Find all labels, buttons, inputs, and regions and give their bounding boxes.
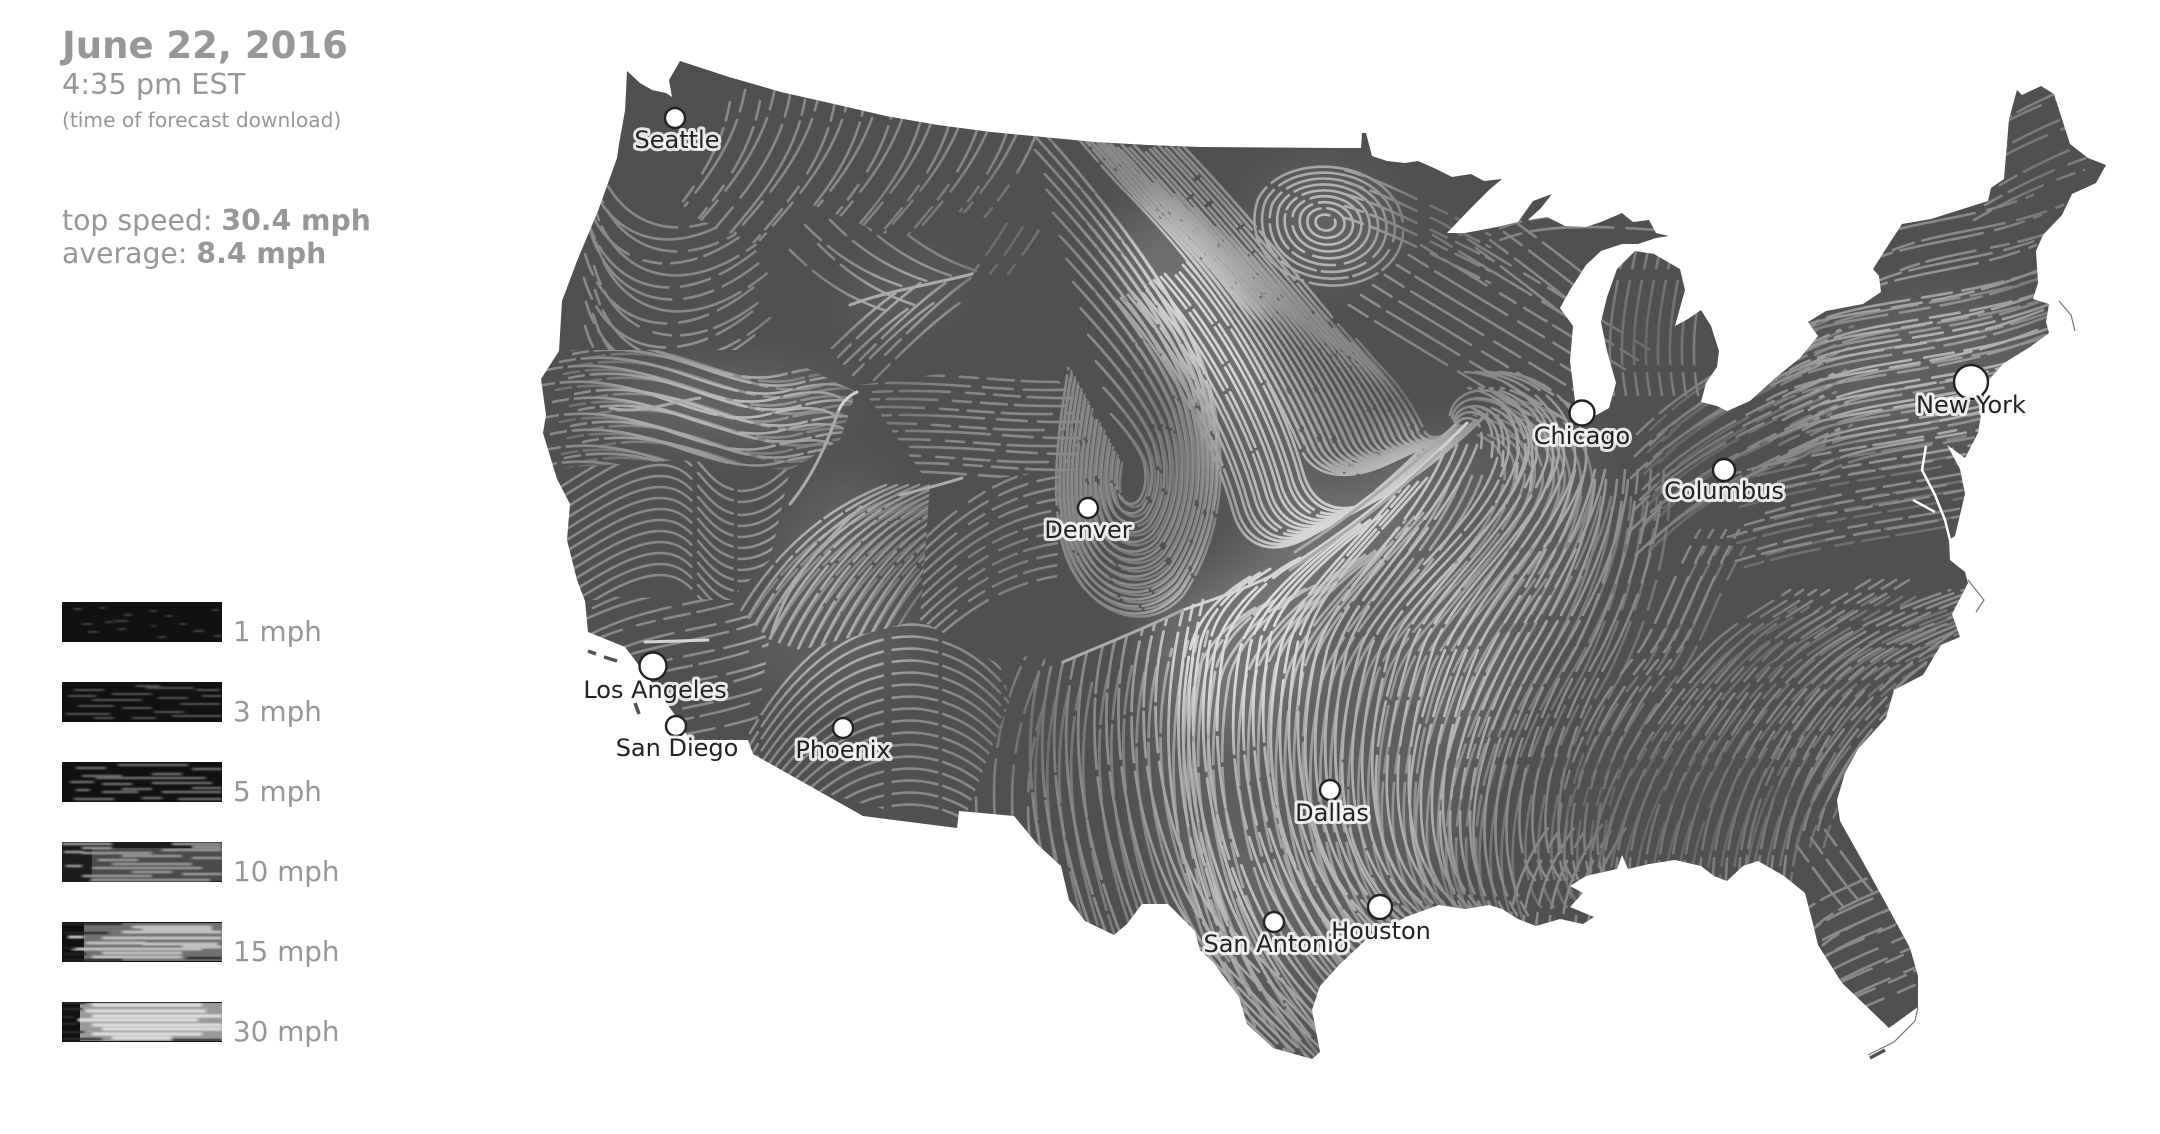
city: San Diego: San Diego [616, 734, 738, 762]
legend label: 10 mph: 10 mph [233, 855, 340, 888]
city: Dallas: Dallas [1295, 799, 1369, 827]
legend swatch: 5 mph [62, 762, 222, 802]
city: New York [1916, 365, 2026, 419]
streamlines: arcs converging at the spiral [1078, 140, 1463, 476]
streamlines: Utah horizontal [839, 375, 1104, 478]
city: Chicago [1534, 400, 1630, 450]
streamlines: Southern California [552, 510, 783, 779]
streamlines: Gulf coast [1510, 825, 1628, 935]
streamlines: Michigan [1500, 215, 1708, 395]
forecast note: (time of forecast download) [62, 108, 341, 132]
city: Seattle [635, 108, 719, 154]
city: Chicago: Chicago [1534, 422, 1630, 450]
legend swatch: 10 mph [62, 842, 222, 882]
city: Houston [1331, 895, 1431, 945]
bright streaks along convergence lines [610, 274, 1467, 662]
legend label: 5 mph: 5 mph [233, 775, 322, 808]
city: Denver [1044, 498, 1132, 544]
streamlines: Virginia and Appalachians [1722, 430, 2010, 567]
city: San Antonio: San Antonio [1203, 930, 1349, 958]
streamlines: Denver arcs [1024, 110, 1221, 617]
wind map of the contiguous United States [530, 61, 2110, 1071]
city: Columbus [1664, 459, 1784, 505]
streamlines: Colorado plateau [900, 464, 1075, 674]
city: San Diego [616, 716, 738, 762]
wind tone haze [605, 165, 2062, 1060]
streamlines: South Texas tip [1198, 932, 1320, 1059]
legend swatch: 15 mph [62, 922, 222, 962]
streamlines: spiral near Chicago [1450, 390, 1532, 490]
city: San Antonio [1203, 912, 1349, 958]
legend swatch: 3 mph [62, 682, 222, 722]
streamlines: Minnesota and Wisconsin [1349, 224, 1650, 430]
streamlines: Florida [1796, 830, 1943, 1035]
streamlines: New Mexico trough [976, 654, 1061, 884]
land base [541, 61, 2106, 1059]
wind speed statistics [62, 204, 371, 270]
city: Phoenix: Phoenix [795, 736, 891, 764]
streamlines: vortex over the Dakotas [1254, 167, 1403, 286]
streamlines: Pennsylvania and New York [1767, 260, 2091, 475]
streamlines: Ohio valley [1628, 315, 1853, 555]
date heading: June 22, 2016 [59, 24, 348, 67]
wind speed statistics: average: 8.4 mph [62, 237, 326, 270]
legend label: 15 mph: 15 mph [233, 935, 340, 968]
streamlines: California waves [530, 441, 800, 640]
streamlines: Montana ridge [640, 88, 1045, 252]
forecast time: 4:35 pm EST [62, 67, 246, 101]
city markers and labels [583, 108, 2026, 958]
wind streamlines [530, 75, 2110, 1071]
city: Denver: Denver [1044, 516, 1132, 544]
city: Los Angeles [583, 652, 727, 704]
legend swatch: 30 mph [62, 1002, 222, 1042]
streamlines: S-curve joining the front [1106, 145, 1487, 547]
streamlines: northern border [1345, 170, 1490, 283]
city: Houston: Houston [1331, 917, 1431, 945]
streamlines: Texas fan and jet [1030, 445, 1482, 1071]
city: Seattle: Seattle [635, 126, 719, 154]
legend label: 1 mph: 1 mph [233, 615, 322, 648]
legend: wind speed swatches [62, 602, 340, 1048]
legend swatch: 1 mph [62, 602, 222, 642]
city: Dallas [1295, 780, 1369, 827]
lake and bay highlights [1913, 446, 1950, 540]
city: New York: New York [1916, 391, 2026, 419]
streamlines: Arizona waves [750, 613, 1010, 925]
streamlines: Nevada to Arizona [716, 485, 1045, 673]
streamlines: Plains to Great Lakes [1342, 372, 1670, 957]
legend label: 30 mph: 30 mph [233, 1015, 340, 1048]
streamlines: Oregon bowls [584, 158, 771, 395]
legend label: 3 mph: 3 mph [233, 695, 322, 728]
streamlines: Idaho feather [790, 150, 1066, 386]
city: Columbus: Columbus [1664, 477, 1784, 505]
streamlines: Southeast [1558, 530, 2015, 897]
streamlines: Nevada bright band [539, 342, 896, 502]
coastal details [588, 301, 2075, 1058]
wind speed statistics: top speed: 30.4 mph [62, 204, 371, 237]
city: Los Angeles: Los Angeles [583, 676, 727, 704]
streamlines: New England [1863, 75, 2110, 290]
city: Phoenix [795, 718, 891, 764]
